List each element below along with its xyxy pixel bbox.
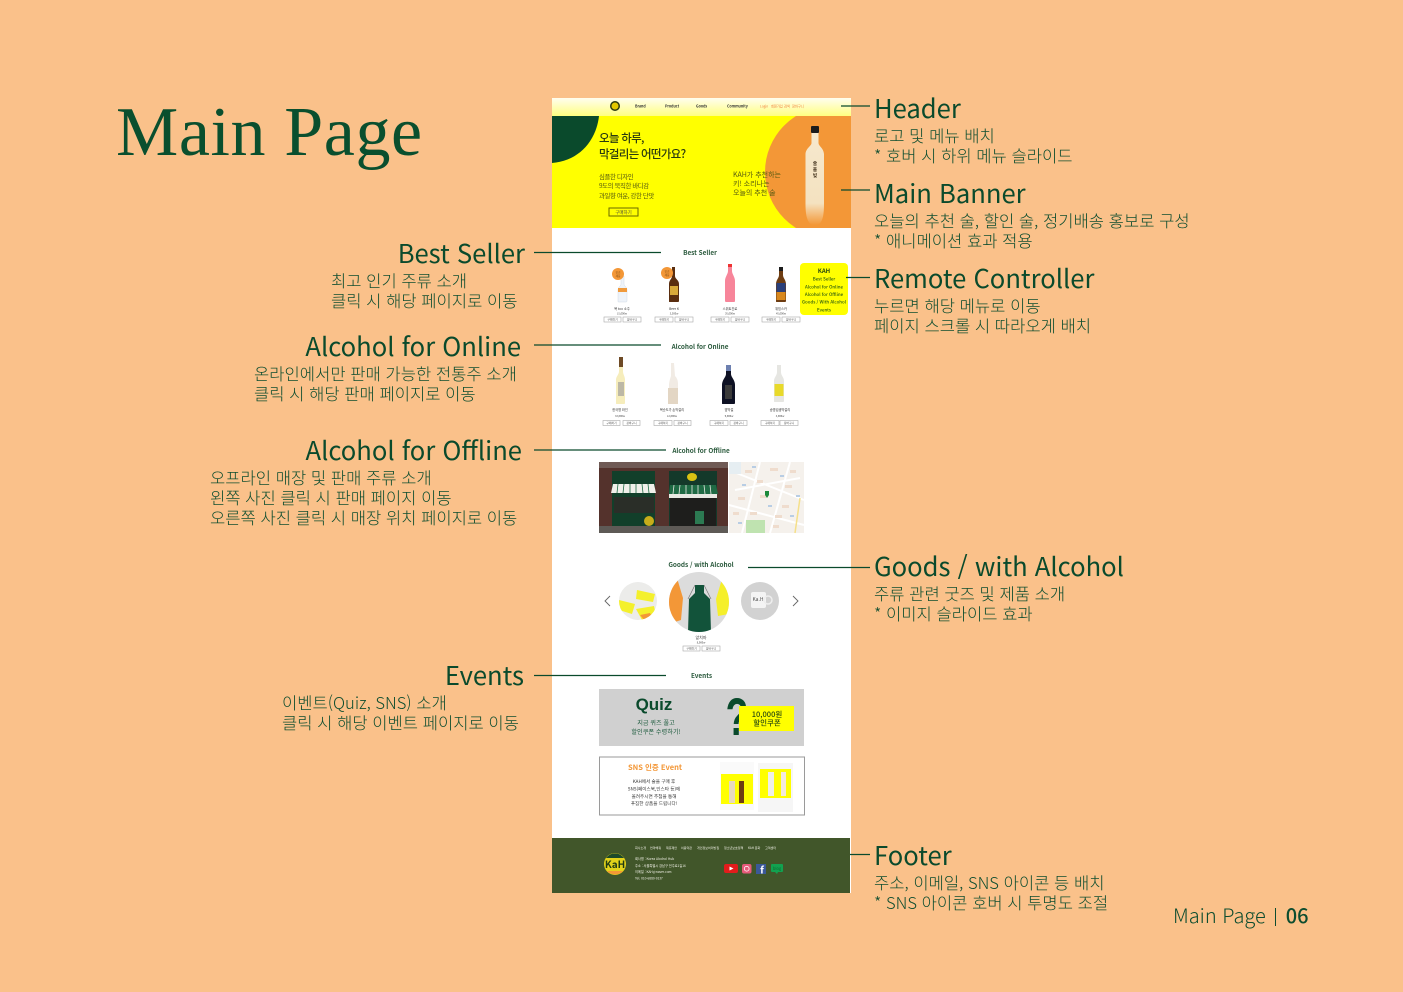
footer: Tel. 010-6880-9137 <box>635 876 663 880</box>
bottle 3 <box>725 264 735 302</box>
note: alcohol for offline: Alcohol for Offline <box>306 431 522 468</box>
bottle 2 <box>669 267 679 302</box>
section: alcohol for online: 구매하기 <box>606 421 617 425</box>
footer: 개인정보처리방침 <box>697 845 719 850</box>
main banner: 술 <box>813 160 818 167</box>
note: main banner <box>874 174 1190 252</box>
note: remote controller: 페이지 스크롤 시 따라오게 배치 <box>874 313 1091 337</box>
note: goods with alcohol: Goods / with Alcohol <box>874 547 1124 584</box>
section: alcohol for online: 구매하기 <box>658 421 669 425</box>
section: best seller: 장바구니 <box>679 318 690 322</box>
section: alcohol for online: 구매하기 <box>714 421 725 425</box>
title: Main Page <box>116 94 423 171</box>
sns event banner: 올려주시면 추첨을 통해 <box>632 793 676 800</box>
footer: KAH 문화 <box>748 845 761 850</box>
footer: 제휴제안 <box>666 845 677 850</box>
note: events <box>282 656 524 734</box>
section: best seller: Best Seller <box>683 248 717 257</box>
note: footer <box>874 836 1108 914</box>
footer: 회사소개 <box>635 845 646 850</box>
quiz banner: 지금 퀴즈 풀고 <box>637 718 675 727</box>
note: alcohol for online: 온라인에서만 판매 가능한 전통주 소개 <box>254 361 517 385</box>
section: best seller: 장바구니 <box>735 318 746 322</box>
website screenshot mockup <box>552 98 851 893</box>
section: alcohol for online: 33,000w <box>615 414 625 418</box>
remote controller: Events <box>817 308 831 314</box>
note: main banner: * 애니메이션 효과 적용 <box>874 228 1033 252</box>
site header: 회원가입 <box>771 104 783 108</box>
section: goods with alcohol: 앞치마 <box>695 634 707 641</box>
sns event banner: SNS 인증 Event <box>628 762 683 773</box>
remote controller: KAH <box>818 266 830 275</box>
remote controller <box>800 263 848 315</box>
section: goods with alcohol <box>605 560 798 651</box>
section: alcohol for online: 12,000w <box>667 414 677 418</box>
note: alcohol for online: 클릭 시 해당 판매 페이지로 이동 <box>254 381 476 405</box>
note: best seller: 클릭 시 해당 페이지로 이동 <box>331 288 518 312</box>
site header: Product <box>665 104 680 110</box>
site header: Community <box>727 104 749 110</box>
section: best seller: 45,000w <box>776 312 786 316</box>
goods center apron <box>669 572 729 632</box>
section: best seller: 인기 <box>616 270 621 274</box>
note: header <box>874 89 1073 167</box>
remote controller: Goods / With Alcohol <box>802 298 847 306</box>
section: best seller: 제품 <box>616 274 621 278</box>
site header: 장바구니 <box>792 104 804 108</box>
note: goods with alcohol: 주류 관련 굿즈 및 제품 소개 <box>874 581 1065 605</box>
icon: blog: blog <box>773 866 782 872</box>
sns event banner: 푸짐한 상품을 드립니다! <box>631 800 678 807</box>
icon: facebook: f <box>760 862 765 876</box>
sns event banner: KAH에서 술을 구매 후 <box>633 778 675 785</box>
section: goods with alcohol: 장바구니 <box>706 647 717 651</box>
main banner: 과일향 여운, 강한 단맛 <box>599 191 654 200</box>
footer: 회사명 : Korea Alcohol Hub <box>635 856 674 861</box>
section: goods with alcohol: Goods / with Alcohol <box>668 560 734 569</box>
section: best seller <box>604 248 800 322</box>
sns event banner: SNS(페이스북,인스타 등)에 <box>628 786 680 792</box>
section: goods with alcohol: 구매하기 <box>686 647 697 651</box>
chevrons <box>605 596 610 606</box>
bottle 4 <box>774 365 784 402</box>
note: footer: * SNS 아이콘 호버 시 투명도 조절 <box>874 890 1108 914</box>
main banner: 오늘 하루, <box>599 130 644 146</box>
quiz banner: 할인쿠폰 <box>753 718 781 728</box>
note: goods with alcohol: * 이미지 슬라이드 효과 <box>874 601 1033 625</box>
note: alcohol for online <box>254 327 521 405</box>
section: alcohol for online: 9,000w <box>725 414 733 418</box>
section: best seller: 위빙스카 <box>775 306 787 311</box>
section: best seller: 35,000w <box>725 312 735 316</box>
note: best seller: 최고 인기 주류 소개 <box>331 268 467 292</box>
main banner: 구매하기 <box>615 209 632 216</box>
section: best seller: 구매하기 <box>766 318 777 322</box>
goods left <box>619 582 657 620</box>
section: alcohol for online: 한국명 와인 <box>612 407 628 412</box>
site header <box>552 98 851 116</box>
note: alcohol for offline <box>210 431 522 529</box>
main banner <box>552 116 851 228</box>
main banner: 키! 소리나는 <box>733 179 770 189</box>
bottle 3 <box>722 365 735 404</box>
section: best seller: 3,500w <box>670 312 678 316</box>
site header: Goods <box>696 104 707 110</box>
bottle 2 <box>668 363 678 404</box>
section: best seller: 장바구니 <box>786 318 797 322</box>
footer <box>552 838 850 893</box>
footer: 언약해줘 <box>650 845 661 850</box>
page background <box>552 98 851 893</box>
section: alcohol for offline <box>599 446 804 533</box>
section: best seller: 복 too 소주 <box>614 306 630 311</box>
main banner: 9도의 묵직한 바디감 <box>599 181 649 190</box>
icon: facebook <box>756 862 766 876</box>
section: best seller: 스위트진로 <box>723 306 737 311</box>
note: header: Header <box>874 89 961 126</box>
note: best seller: Best Seller <box>398 234 525 271</box>
icon: youtube <box>724 864 738 873</box>
section: best seller: 제품 <box>665 273 670 277</box>
quiz banner: Quiz <box>636 695 672 714</box>
main banner: 막걸리는 어떤가요? <box>599 146 687 162</box>
footer: KaH <box>605 856 625 871</box>
main banner: 심플한 디자인 <box>599 172 634 181</box>
note: alcohol for online: Alcohol for Online <box>305 327 521 364</box>
icon: instagram <box>742 864 752 874</box>
section: best seller: 15,000w <box>617 312 627 316</box>
note: header: * 호버 시 하위 메뉴 슬라이드 <box>874 143 1073 167</box>
main banner: KAH가 추천하는 <box>733 170 782 180</box>
section: alcohol for online: 복순도가 손막걸리 <box>660 407 684 412</box>
store photo <box>599 462 728 533</box>
note: events: 클릭 시 해당 이벤트 페이지로 이동 <box>282 710 519 734</box>
note: goods with alcohol <box>874 547 1124 625</box>
section: alcohol for online: 장바구니 <box>733 421 744 425</box>
note: footer: 주소, 이메일, SNS 아이콘 등 배치 <box>874 870 1104 894</box>
footer: 주소 : 서울특별시 강남구 언주로1길16 <box>635 863 686 868</box>
bottle 1 <box>618 276 627 302</box>
section: alcohol for online: 3,000w <box>776 414 784 418</box>
quiz banner: ? <box>726 687 748 747</box>
remote controller: Alcohol for Online <box>805 284 843 290</box>
section: events <box>599 671 804 815</box>
note: remote controller: 누르면 해당 메뉴로 이동 <box>874 293 1041 317</box>
note: events: 이벤트(Quiz, SNS) 소개 <box>282 690 447 714</box>
footer: 고객센터 <box>765 845 776 850</box>
section: alcohol for online: 장바구니 <box>784 421 795 425</box>
goods right <box>741 582 779 620</box>
quiz banner: 할인쿠폰 수령하기! <box>631 727 681 736</box>
icon: blog <box>771 864 783 874</box>
main banner: 오늘의 추천 술 <box>733 188 776 198</box>
footer: 청소년보호정책 <box>724 845 744 850</box>
section: alcohol for offline: Alcohol for Offline <box>671 446 730 455</box>
site header: Login <box>760 104 768 108</box>
section: best seller: Beer K <box>669 306 680 311</box>
section: best seller: 장바구니 <box>627 318 638 322</box>
section: alcohol for online: 송명섭생막걸리 <box>770 407 790 412</box>
remote controller: Best Seller <box>813 276 835 282</box>
note: alcohol for offline: 오른쪽 사진 클릭 시 매장 위치 페이지로 이동 <box>210 505 517 529</box>
note: header: 로고 및 메뉴 배치 <box>874 123 995 147</box>
note: main banner: Main Banner <box>874 174 1026 211</box>
main banner: 을 <box>813 167 818 173</box>
footer: 이용약관 <box>681 845 692 850</box>
note: main banner: 오늘의 추천 술, 할인 술, 정기배송 홍보로 구성 <box>874 208 1190 232</box>
section: alcohol for online <box>603 342 798 426</box>
section: events: Events <box>691 671 712 680</box>
section: best seller: 인기 <box>665 270 670 274</box>
goods right: Ka.H <box>752 596 764 603</box>
note: best seller <box>331 234 525 312</box>
section: alcohol for online: Alcohol for Online <box>671 342 729 351</box>
section: alcohol for online: 밤막걸 <box>725 407 733 412</box>
page number: Main Page 06 <box>1173 900 1309 929</box>
section: alcohol for online: 장바구니 <box>626 421 637 425</box>
section: best seller: 구매하기 <box>715 318 726 322</box>
section: alcohol for online: 구매하기 <box>765 421 776 425</box>
footer: 이메일 : KAH@naver.com <box>635 869 672 874</box>
sns event banner <box>600 757 804 815</box>
site header: 검색 <box>784 104 790 108</box>
remote controller: Alcohol for Offline <box>805 291 844 298</box>
section: best seller: 구매하기 <box>659 318 670 322</box>
section: alcohol for online: 장바구니 <box>677 421 688 425</box>
bottle 1 <box>616 357 625 404</box>
note: remote controller <box>874 259 1094 337</box>
main banner: 빚 <box>813 172 817 179</box>
note: footer: Footer <box>874 836 952 873</box>
bottle 4 <box>776 267 786 302</box>
note: events: Events <box>445 656 524 693</box>
note: remote controller: Remote Controller <box>874 259 1094 296</box>
section: goods with alcohol: 8,000w <box>697 640 705 644</box>
quiz banner <box>599 687 804 747</box>
note: alcohol for offline: 오프라인 매장 및 판매 주류 소개 <box>210 465 432 489</box>
map <box>729 462 804 533</box>
quiz banner: 10,000원 <box>752 709 782 720</box>
section: best seller: 구매하기 <box>607 318 618 322</box>
note: alcohol for offline: 왼쪽 사진 클릭 시 판매 페이지 이동 <box>210 485 452 509</box>
site header: Brand <box>635 104 646 110</box>
